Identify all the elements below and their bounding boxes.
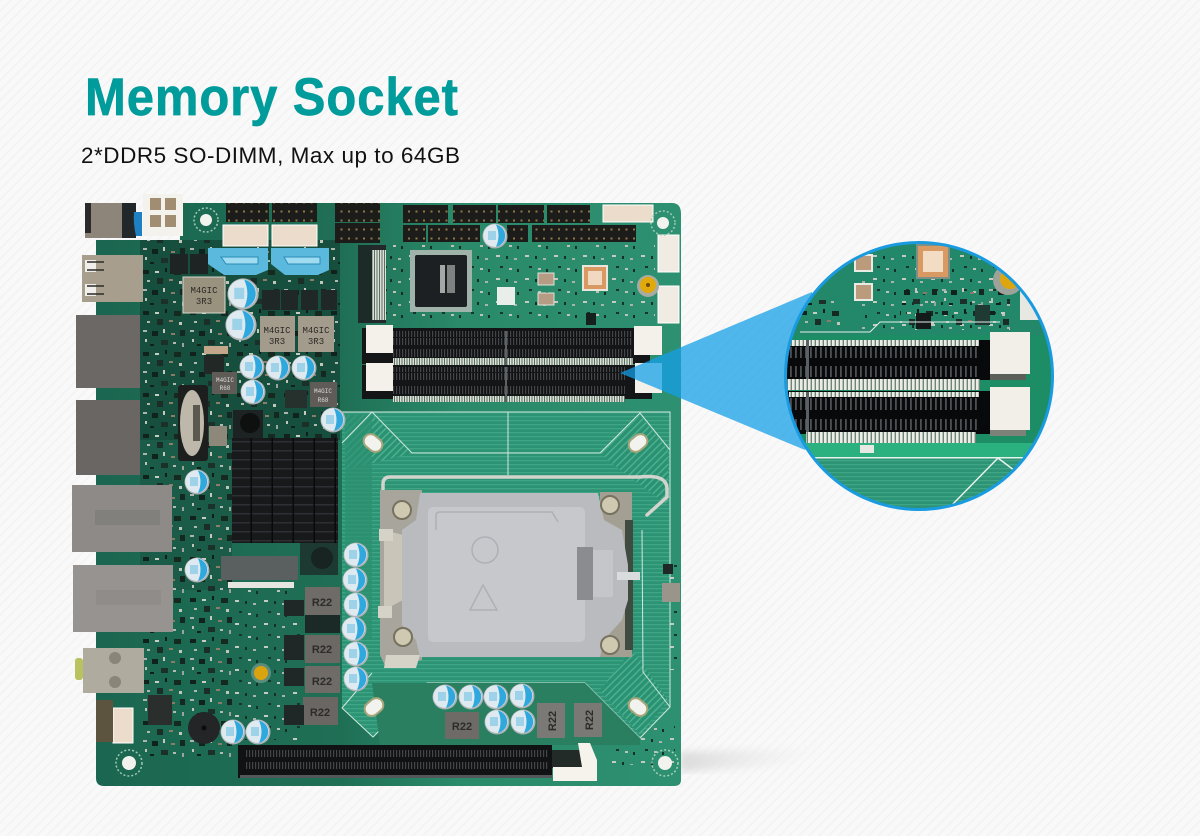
magnified contacts lower [806,432,976,443]
magnifier ring [786,242,1052,510]
cpu socket [378,476,667,668]
lan port one [76,315,140,388]
magnifier circle [784,240,1054,517]
r22 inductors: R22 [312,597,332,609]
top pin headers [226,203,636,243]
inductors magic: M4GIC [263,326,291,336]
sata ports [208,248,329,275]
r22 inductors: R22 [547,711,559,731]
inductors magic: M4GIC [216,377,234,384]
inductors magic: 3R3 [308,337,324,347]
memory sockets [362,325,662,402]
socket two [362,365,652,402]
inductors magic [183,277,337,446]
r22 inductors: R22 [312,644,332,656]
r22 inductors: R22 [312,676,332,688]
magnified socket two [784,391,990,434]
magnified contacts strip [784,379,980,390]
motherboard [96,203,681,786]
small surface parts [96,254,607,742]
cover tabs [577,547,640,600]
4 pin power connector [143,194,183,236]
display port one [72,485,172,552]
inductors magic: 3R3 [196,297,212,307]
display port two [73,565,173,632]
r22 inductors: R22 [310,707,330,719]
metal frame [380,490,422,668]
heatsink [232,438,338,543]
rear io ports [72,194,183,693]
r22 inductors: R22 [584,710,596,730]
inductors magic: 3R3 [269,337,285,347]
white pin connectors [113,205,679,743]
magnified board content [787,244,1038,508]
inductors magic: M4GIC [190,286,218,296]
audio usb port [75,648,144,693]
dark capacitors [188,410,338,744]
m.2 key slot top [358,245,386,323]
magnified lower pcb [805,443,1032,508]
socket one [362,328,650,365]
cpu zone traces [342,412,670,738]
inductors magic: R68 [220,385,231,392]
magnified socket one [787,340,990,380]
inductors magic: M4GIC [314,388,332,395]
power chips [262,290,337,310]
magnified latches [990,332,1030,436]
gold standoffs [251,275,659,683]
board shadow [680,747,840,772]
socket latches [366,325,662,393]
highlight beam [620,292,830,450]
retention lever [383,476,667,515]
r22 inductors [284,564,680,739]
inductors magic: M4GIC [302,326,330,336]
pcie slot [238,743,597,781]
usb stack [82,255,143,302]
lan port two [76,400,140,475]
front clips [378,529,420,668]
power jack [85,203,142,238]
electrolytic capacitors [184,224,536,744]
corner screws [393,496,619,654]
m.2 slot bottom [221,556,298,588]
pcb [96,203,681,786]
inductors magic: R68 [318,397,329,404]
lower zone fill [372,683,640,745]
mounting holes [116,208,678,776]
cover plate [402,493,628,657]
r22 inductors: R22 [452,721,472,733]
upper board area [800,244,1038,332]
component texture [140,240,678,765]
subtitle: 2*DDR5 SO-DIMM, Max up to 64GB [81,143,460,168]
battery holder [178,385,208,461]
pcie latch [553,743,597,781]
raised cover [428,507,585,642]
network chip [410,250,472,312]
cover markings [436,512,558,610]
title: Memory Socket [85,67,458,126]
